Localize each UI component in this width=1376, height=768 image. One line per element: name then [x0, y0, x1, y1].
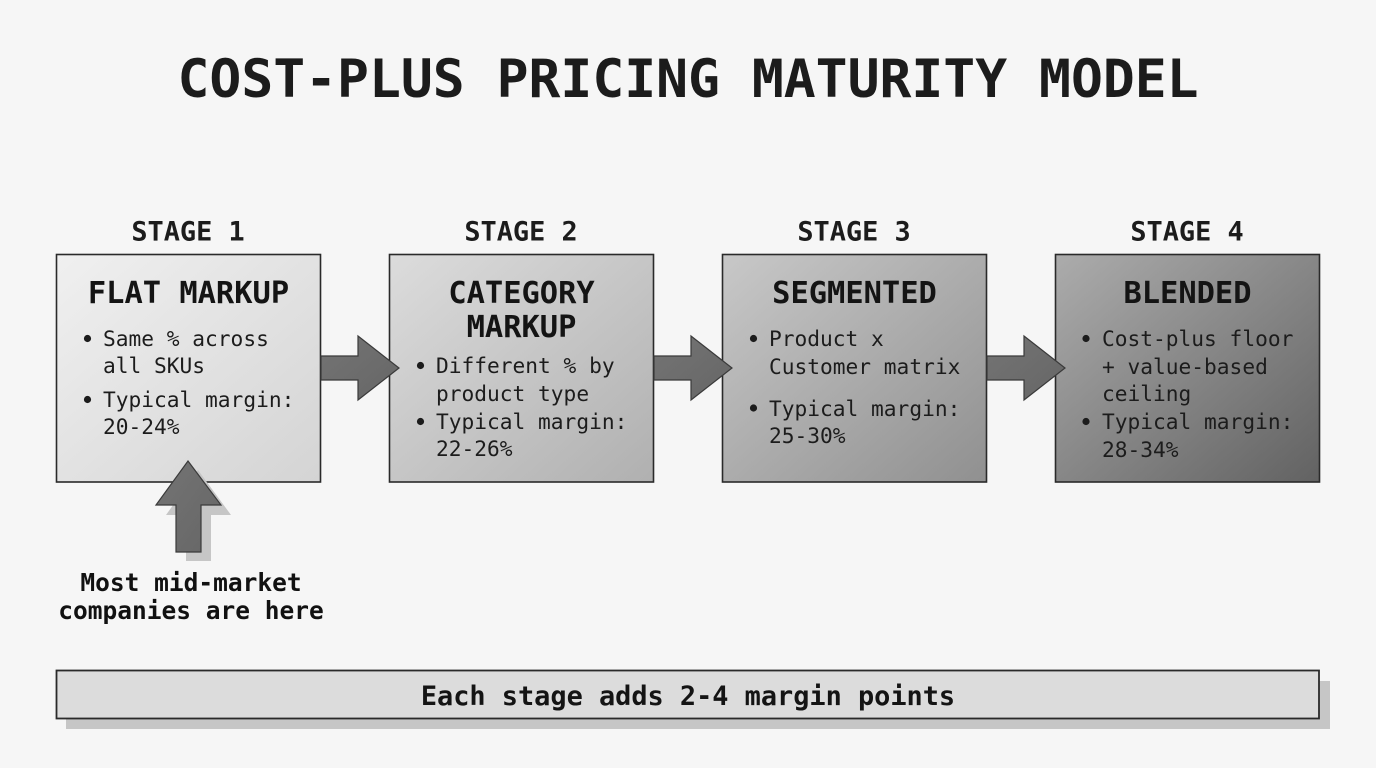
callout: most mid-market companies: Most mid-market — [80, 568, 302, 597]
banner: margin points — [56, 670, 1330, 729]
arrow: stage 1 to 2 — [321, 336, 399, 400]
stage 3 label: STAGE 3 — [797, 216, 911, 248]
bullet list: blended: Cost-plus floor — [1102, 326, 1293, 351]
bullet list: blended — [1082, 326, 1293, 462]
bullet list: category markup: Typical margin: — [436, 409, 627, 434]
bullet list: segmented: Product x — [769, 326, 884, 351]
arrow: up marker to stage 1 — [156, 461, 231, 561]
panel: blended — [1056, 254, 1320, 482]
arrow: stage 2 to 3 — [654, 336, 732, 400]
stage 4 label: STAGE 4 — [1130, 216, 1244, 248]
bullet list: blended: ceiling — [1102, 381, 1191, 406]
heading: blended: BLENDED — [1123, 276, 1252, 311]
bullet list: blended: + value-based — [1102, 354, 1268, 379]
bullet list: segmented: Typical margin: — [769, 396, 960, 421]
callout: most mid-market companies: companies are here — [58, 596, 324, 625]
bullet list: segmented: 25-30% — [769, 423, 846, 448]
heading: category markup: CATEGORY — [448, 276, 595, 311]
panel: category markup — [390, 254, 654, 482]
bullet list: flat markup: all SKUs — [103, 353, 205, 378]
bullet list: blended: 28-34% — [1102, 437, 1179, 462]
arrow: stage 3 to 4 — [987, 336, 1065, 400]
heading: category markup: MARKUP — [467, 310, 576, 345]
bullet list: blended: Typical margin: — [1102, 409, 1293, 434]
stage 1 label: STAGE 1 — [131, 216, 245, 248]
bullet list: flat markup: 20-24% — [103, 414, 180, 439]
bullet list: category markup: Different % by — [436, 353, 615, 378]
bullet list: segmented — [750, 326, 960, 448]
bullet list: segmented: Customer matrix — [769, 354, 960, 379]
bullet list: flat markup: Typical margin: — [103, 387, 294, 412]
heading: flat markup: FLAT MARKUP — [88, 276, 289, 311]
banner: margin points: Each stage adds 2-4 margin points — [421, 681, 955, 712]
bullet list: flat markup — [84, 326, 294, 439]
bullet list: flat markup: Same % across — [103, 326, 269, 351]
panel: flat markup — [56, 254, 320, 482]
bullet list: category markup — [417, 353, 627, 461]
stage 2 label: STAGE 2 — [464, 216, 578, 248]
panel: segmented — [722, 254, 986, 482]
heading: segmented: SEGMENTED — [772, 276, 937, 311]
bullet list: category markup: 22-26% — [436, 436, 513, 461]
title: COST-PLUS PRICING MATURITY MODEL — [178, 49, 1199, 110]
callout: most mid-market companies — [58, 568, 324, 625]
bullet list: category markup: product type — [436, 381, 589, 406]
